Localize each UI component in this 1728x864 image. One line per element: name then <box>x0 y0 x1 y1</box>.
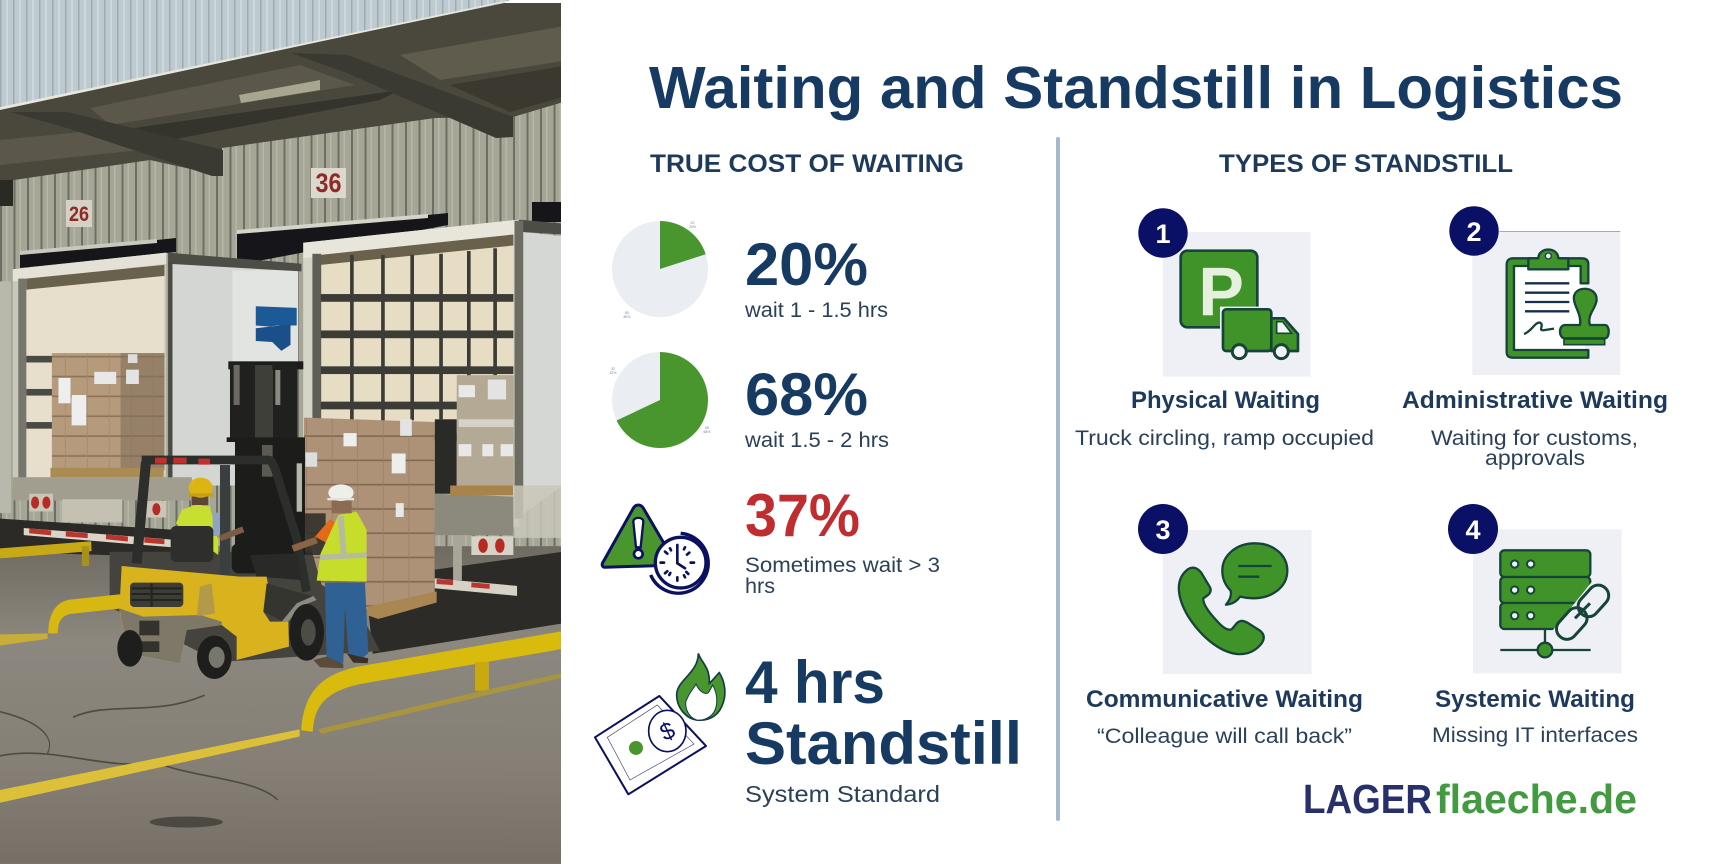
stat: 4 hrs standstill: 4 hrs <box>745 649 885 716</box>
logo: LAGERflaeche.de: LAGER <box>1303 776 1432 822</box>
stat: 37 percent: 37% <box>745 482 860 549</box>
heading: types of standstill: TYPES OF STANDSTILL <box>1219 150 1513 178</box>
stat: 20 percent: wait 1 - 1.5 hrs <box>744 299 888 322</box>
divider <box>1056 137 1060 821</box>
panel: true cost of waiting <box>595 221 1022 807</box>
icon: warning triangle with clock <box>602 505 708 593</box>
badge 1 <box>1138 208 1188 258</box>
pie chart: 68 percent: 32 <box>611 367 615 371</box>
text: administrative waiting: Waiting for customs, <box>1431 427 1638 450</box>
card: administrative waiting <box>1402 206 1668 470</box>
stat: 37 percent: Sometimes wait > 3 <box>745 554 940 577</box>
door openings <box>20 238 176 268</box>
pie chart: 20 percent: 20 <box>691 221 694 225</box>
panel: photo right edge <box>561 0 1728 864</box>
stat: 4 hrs standstill <box>745 649 1022 807</box>
mast <box>235 440 305 555</box>
stat: 37 percent: hrs <box>745 575 775 598</box>
right truck <box>303 220 519 527</box>
wall <box>0 100 570 580</box>
stat: 68 percent: 68% <box>745 361 868 428</box>
dock numbers <box>66 200 92 227</box>
pavement paint lines <box>0 633 48 645</box>
pie chart: 20 percent: 80% <box>623 315 631 319</box>
badge 4: 4 <box>1465 515 1481 545</box>
badge 4 <box>1448 504 1498 554</box>
logo: LAGERflaeche.de <box>1303 776 1637 822</box>
pavement cracks <box>0 695 278 800</box>
icon: clipboard and stamp <box>1472 231 1620 375</box>
panel: types of standstill <box>1075 206 1668 748</box>
photo: loading dock with forklift and trucks <box>0 0 561 864</box>
left truck <box>0 281 11 513</box>
text: systemic waiting: Systemic Waiting <box>1435 686 1635 713</box>
icon: burning money: $ <box>656 717 679 747</box>
text: administrative waiting: approvals <box>1485 447 1585 470</box>
heading: true cost of waiting: TRUE COST OF WAITING <box>650 150 964 178</box>
text: physical waiting: Physical Waiting <box>1131 387 1320 414</box>
forklift wheels <box>117 630 143 667</box>
driver <box>176 504 218 555</box>
title: Waiting and Standstill in Logistics <box>649 55 1623 121</box>
card: systemic waiting <box>1432 504 1638 747</box>
stat: 4 hrs standstill: Standstill <box>745 710 1022 777</box>
pie chart: 68 percent: 68 <box>705 426 709 430</box>
stat: 68 percent <box>744 361 889 452</box>
upper mast <box>228 361 303 369</box>
icon: parking sign and truck <box>1163 232 1311 377</box>
text: communicative waiting <box>1086 686 1363 748</box>
text: administrative waiting: Administrative Waiting <box>1402 387 1668 414</box>
icon: burning money <box>595 653 725 794</box>
logo: LAGERflaeche.de: flaeche.de <box>1436 776 1637 822</box>
icon: server with broken link <box>1473 529 1622 673</box>
left pallet <box>52 353 164 470</box>
steel beams <box>11 112 223 176</box>
photo: loading dock with forklift and trucks: 26 <box>69 203 89 226</box>
badge 3 <box>1138 504 1188 554</box>
ceiling lamp <box>239 80 320 103</box>
badge 2: 2 <box>1466 217 1482 247</box>
top fascia <box>0 0 510 107</box>
pie chart: 68 percent: 68% <box>703 430 711 434</box>
pie chart: 20 percent: 20% <box>689 225 696 229</box>
ground <box>0 546 563 864</box>
forklift and workers <box>117 361 368 679</box>
icon: phone and speech bubble <box>1163 530 1312 674</box>
text: communicative waiting: “Colleague will call back” <box>1097 725 1352 748</box>
badge 2 <box>1449 206 1499 256</box>
stat: 20 percent: 20% <box>745 231 868 298</box>
text: communicative waiting: Communicative Waiting <box>1086 686 1363 713</box>
stat: 37 percent <box>745 482 940 598</box>
icon: parking sign and truck: P <box>1198 254 1244 330</box>
pie chart: 20 percent <box>612 221 708 319</box>
worker <box>325 583 368 663</box>
text: physical waiting <box>1075 387 1374 450</box>
text: physical waiting: Truck circling, ramp occupied <box>1075 427 1374 450</box>
text: systemic waiting: Missing IT interfaces <box>1432 724 1638 747</box>
yellow guard rails <box>0 546 91 553</box>
back pallet <box>457 375 514 485</box>
badge 3: 3 <box>1155 515 1171 545</box>
front pallet <box>304 418 435 610</box>
text: systemic waiting <box>1432 686 1638 747</box>
badge 1: 1 <box>1155 219 1171 249</box>
forklift body <box>119 566 289 663</box>
truck bed <box>13 477 192 500</box>
stat: 20 percent <box>744 231 888 322</box>
photo: loading dock with forklift and trucks: 36 <box>316 168 342 198</box>
pie chart: 68 percent: 32% <box>609 371 617 375</box>
stat: 4 hrs standstill: System Standard <box>745 781 940 807</box>
forklift guard <box>142 460 307 592</box>
pie chart: 68 percent <box>609 352 711 448</box>
canopy underside <box>0 3 570 182</box>
text: administrative waiting <box>1402 387 1668 470</box>
stat: 68 percent: wait 1.5 - 2 hrs <box>744 429 889 452</box>
pie chart: 20 percent: 80 <box>625 311 629 315</box>
card: physical waiting <box>1075 208 1374 450</box>
card: communicative waiting <box>1086 504 1363 748</box>
